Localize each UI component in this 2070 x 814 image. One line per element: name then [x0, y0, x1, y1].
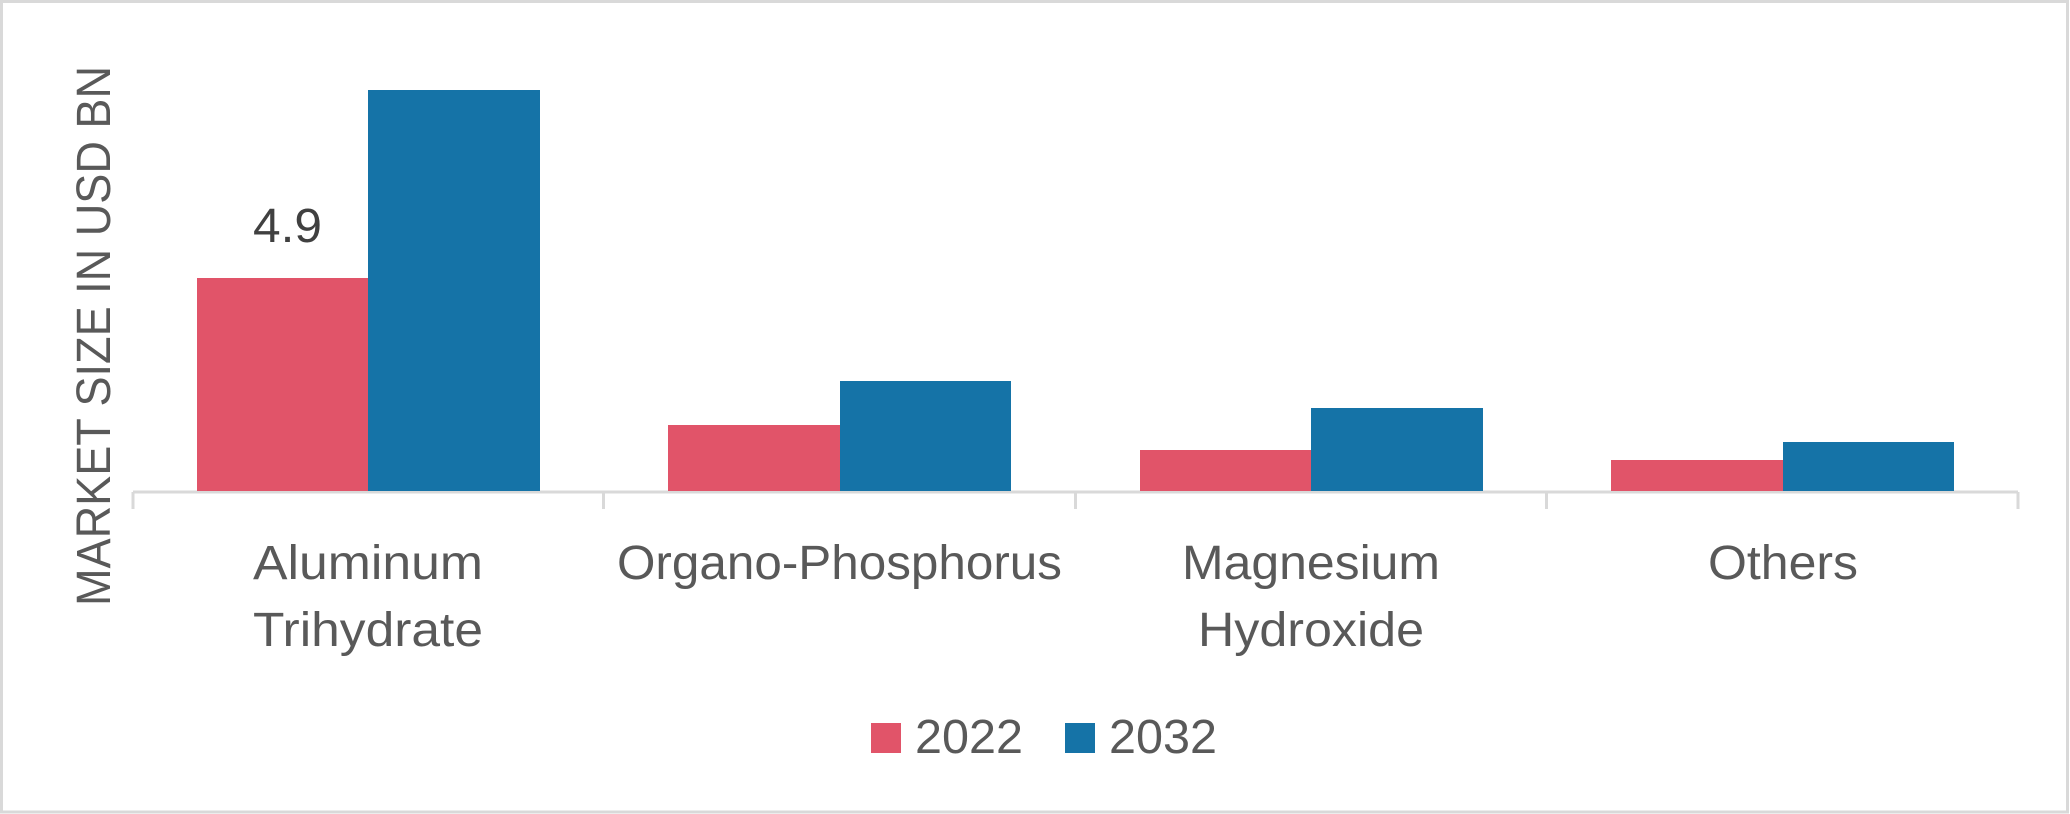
- category label: Magnesium Hydroxide: [1182, 537, 1440, 657]
- category label: Organo-Phosphorus: Organo-Phosphorus: [617, 537, 1062, 590]
- group: Aluminum Trihydrate bars: [197, 90, 540, 491]
- legend: [871, 711, 1217, 764]
- legend item: 2032: 2032: [1109, 711, 1217, 764]
- category label: Magnesium Hydroxide: Magnesium: [1182, 537, 1440, 590]
- group: Others bars: [1611, 442, 1954, 491]
- x axis with tick marks: [133, 492, 2018, 509]
- category label: Magnesium Hydroxide: Hydroxide: [1198, 604, 1424, 657]
- group: Magnesium Hydroxide bars: [1140, 408, 1483, 491]
- y axis title: MARKET SIZE IN USD BN: [68, 66, 121, 606]
- group: Organo-Phosphorus bars: [668, 381, 1011, 491]
- category label: Others: Others: [1708, 537, 1858, 590]
- category label: Aluminum Trihydrate: Aluminum: [253, 537, 483, 590]
- data label: 4.9: 4.9: [253, 200, 322, 253]
- category label: Aluminum Trihydrate: Trihydrate: [253, 604, 483, 657]
- category label: Aluminum Trihydrate: [253, 537, 483, 657]
- legend item: 2022: 2022: [915, 711, 1023, 764]
